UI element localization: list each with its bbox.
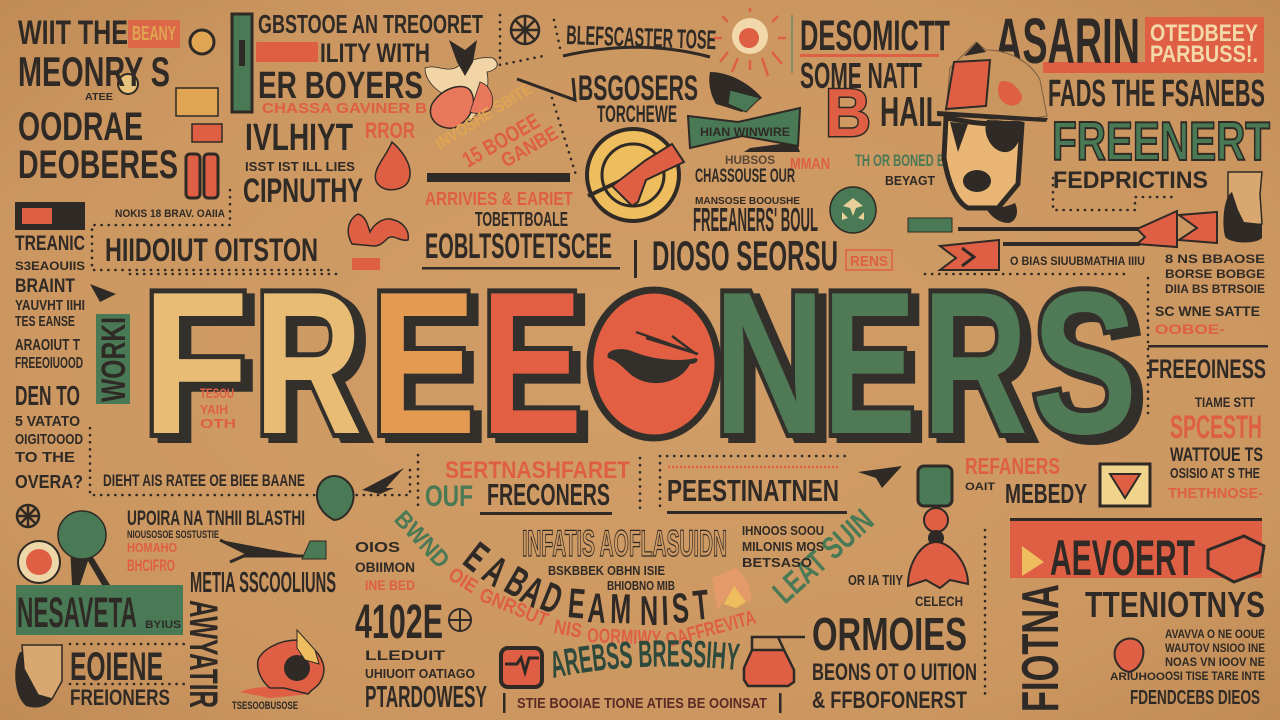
curved text group: OIE — [444, 564, 481, 598]
text block: centre right small: BEYAGT — [885, 173, 935, 188]
text block: red green bottom: STIE BOOIAE TIONE ATIES BE OOINSAT — [517, 695, 767, 712]
banner: red AEVOERT — [1010, 518, 1264, 586]
text block: lower left: METIA SSCOOLIUNS — [190, 567, 336, 599]
curved text group: S — [670, 586, 690, 633]
text block: left column: ARAOIUT T — [15, 337, 80, 354]
green vertical tab: WORKI — [95, 317, 133, 402]
curved text group: INFATIS AOFLASUIDN — [522, 523, 727, 564]
text block: lower middle left: OBIIMON — [355, 559, 415, 575]
text block: centre small: MMAN — [790, 156, 830, 173]
text block: top second column: ER BOYERS — [258, 65, 423, 107]
dashed box: caption under title — [90, 428, 410, 495]
text block: lower left names: EOIENE — [70, 645, 163, 689]
dotted rule above title — [130, 274, 1148, 420]
text block: lower middle left: UHIUOIT OATIAGO — [365, 666, 475, 681]
curved text group: I — [661, 588, 669, 635]
red small text under title letters: OTH — [200, 416, 236, 431]
text block: lower middle left: LLEDUIT — [365, 647, 446, 663]
text block: ormoies: ORMOIES — [812, 608, 967, 660]
text block: centre small: MANSOSE BOOUSHE — [695, 196, 800, 207]
text block: bottom right — [1012, 584, 1265, 712]
icon: small plane — [858, 466, 902, 488]
text block: upper band left: HIIDOIUT OITSTON — [105, 232, 318, 268]
title shadow layer: E — [378, 254, 484, 481]
text block: top second column: GBSTOOE AN TREOORET — [258, 9, 483, 39]
text block: right headline: FEDPRICTINS — [1053, 167, 1208, 194]
icon: green circle badge — [830, 187, 876, 233]
text block: lower left names — [70, 644, 185, 710]
icon: red figure — [908, 466, 968, 588]
curved text group: N — [640, 589, 658, 635]
text block: lower middle left — [355, 539, 487, 714]
text block: bottom right: AVAVVA O NE OOUE — [1165, 627, 1265, 641]
dashed box: caption under title: DIEHT AIS RATEE OE BIEE BAANE — [103, 471, 305, 490]
text block: bottom right: WAUTOV NSIOO INE — [1165, 641, 1265, 655]
text block: left column: S3EAOUIIS — [15, 259, 85, 273]
text block: freeconers heading: FRECONERS — [487, 477, 610, 512]
curved text group: GNRSUT — [476, 584, 551, 632]
text block: lower left: UPOIRA NA TNHII BLASTHI — [127, 507, 305, 530]
banner: top right red: PARBUSS!. — [1150, 41, 1258, 68]
curved text group: E — [566, 581, 587, 628]
main title: FREEONERS: S — [1032, 249, 1137, 476]
icon: green ribbon — [688, 72, 800, 152]
red tilted label — [432, 79, 562, 172]
arrow: lower left green — [220, 540, 326, 562]
text block: left column: 5 VATATO — [15, 413, 80, 430]
title shadow layer: E — [489, 256, 590, 482]
poster: FREEANERS' BOUL — [693, 201, 818, 238]
curved text group: BSKBBEK OBHN ISIE — [548, 563, 665, 578]
curved text group: IHNOOS SOOU — [742, 523, 824, 538]
text block: top centre — [517, 20, 717, 128]
icon: small heart blob — [712, 568, 752, 610]
red small text under title letters: YAIH — [200, 402, 228, 417]
icon: green tree and red seal — [18, 511, 110, 585]
icon: red splash — [348, 214, 408, 270]
icon: helmet man with sunglasses — [937, 42, 1048, 223]
curved text group: D — [534, 574, 569, 624]
text block: freeconers heading — [418, 455, 640, 515]
curved text group: M — [610, 587, 632, 633]
text block: freeconers heading: SERTNASHFARET — [445, 457, 630, 484]
text block: top second column: CIPNUTHY — [243, 172, 363, 210]
text block: lower middle left: OIOS — [355, 539, 400, 556]
text block: right small: O BIAS SIUUBMATHIA IIIU — [1010, 254, 1145, 268]
curved text group: A — [475, 547, 515, 596]
text block: top centre: TORCHEWE — [597, 101, 677, 128]
text block: lower left names: FREIONERS — [70, 685, 170, 710]
banner: green NESAVETA — [16, 585, 183, 637]
icon: bottle right — [1224, 172, 1262, 242]
text block: left column: BRAINT — [15, 276, 75, 297]
text block: freeconers heading: OUF — [425, 480, 473, 513]
icon: red drop — [375, 142, 410, 190]
dotted divider right — [984, 530, 986, 700]
text block: lower right: MEBEDY — [1005, 478, 1087, 509]
text block: top right: SOME NATT — [800, 55, 922, 96]
text block: top left: ATEE — [85, 92, 113, 103]
title shadow layer: R — [262, 254, 370, 481]
text block: peestination — [660, 456, 847, 514]
icon: green ribbon: HIAN WINWIRE — [700, 125, 790, 139]
curved text group: E — [455, 534, 497, 581]
curved text group: B — [497, 558, 536, 608]
text block: lower left: BHCIFRO — [127, 556, 175, 575]
title shadow layer: S — [1040, 254, 1145, 481]
curved text group: BWND — [389, 506, 455, 574]
text block: lower left: HOMAHO — [127, 540, 177, 555]
curved text group: BETSASO — [742, 555, 812, 570]
icon: lower left machine — [15, 645, 62, 708]
icon: green vertical bar — [232, 14, 252, 112]
caption small: NOKIS 18 BRAV. OAIIA — [115, 208, 225, 220]
curved text group: NIS — [552, 616, 584, 643]
text block: top right: DESOMICTT — [800, 12, 950, 60]
banner: green NESAVETA: NESAVETA — [17, 589, 137, 637]
text block: top left: OODRAE — [18, 105, 143, 149]
red tilted label: GANBE — [498, 122, 562, 172]
text block: bottom right: NOAS VN IOOV NE — [1165, 655, 1265, 669]
text block: lower middle left: 4102E — [355, 596, 443, 649]
text block: left column: TES EANSE — [15, 313, 75, 330]
text block: centre small: HUBSOS — [725, 153, 775, 167]
red small text under title letters: TESOU — [200, 385, 234, 401]
text block: top right: HAIL — [880, 88, 942, 135]
icon: bottom jar — [744, 637, 805, 686]
text block: right small: DIIA BS BTRSOIE — [1165, 282, 1265, 296]
text block: right small: OOBOE- — [1155, 321, 1225, 337]
text block: centre small: CHASSOUSE OUR — [695, 166, 795, 187]
banner: top right red: OTEDBEEY — [1150, 20, 1258, 47]
curved text group — [389, 502, 880, 652]
heading: Asarin: ASARIN — [995, 5, 1140, 77]
text block: left column: TO THE — [15, 449, 75, 466]
text block: top second column: RROR — [365, 118, 415, 143]
text block: ormoies — [812, 608, 977, 714]
text block: bottom right: OSI TISE TARE INTE — [1165, 669, 1265, 683]
text block: right of centre band: RENS — [850, 253, 888, 270]
curved text group: LEAT SUIN — [766, 502, 880, 610]
text block: bottom right: FIOTNA — [1012, 584, 1070, 712]
text block: bottom right: ARIUHOO — [1110, 671, 1165, 683]
banner: top right red — [1043, 17, 1264, 73]
text block: peestination: PEESTINATNEN — [667, 473, 839, 508]
curved text group: MILONIS MOS — [742, 539, 824, 554]
text block: top second column: ISST IST ILL LIES — [245, 159, 355, 174]
main title: FREEONERS: R — [922, 251, 1028, 477]
text block: top centre: BSGOSERS — [578, 69, 698, 108]
text block: centre archives: ARRIVIES & EARIET — [425, 189, 573, 209]
icon: sunburst — [714, 8, 793, 76]
text block: ormoies: BEONS OT O UITION — [812, 659, 977, 686]
text block: left column: DEN TO — [15, 380, 80, 411]
icon: bottom right red bird — [1115, 638, 1143, 672]
icon: red b letter: B — [825, 75, 871, 151]
curved text group: A — [586, 586, 607, 633]
text block: top second column: IVLHIYT — [245, 117, 353, 159]
text block: right small: THETHNOSE- — [1168, 485, 1263, 502]
title letter O with bowl icon — [590, 290, 718, 438]
text block: centre archives: EOBLTSOTETSCEE — [425, 227, 612, 266]
text block: lower middle left: INE BED — [365, 577, 415, 593]
text block: top left — [18, 14, 178, 187]
text block: lower left — [127, 507, 336, 599]
icon: small wheel — [17, 505, 39, 527]
text block: right headline — [1048, 73, 1270, 210]
curved text group: OAFFREVITA — [664, 607, 758, 652]
text block: top left: WIIT THE — [18, 14, 128, 52]
text block: centre archives — [422, 189, 620, 270]
icon: yellow circle with red wedge — [587, 129, 684, 221]
banner: green NESAVETA: BYIUS — [145, 619, 181, 631]
curved text group: BHIOBNO MIB — [607, 578, 675, 593]
title shadow layer: E — [831, 254, 924, 481]
text block: red green bottom — [503, 640, 782, 713]
dark stripe bar — [427, 173, 570, 182]
red small text under title letters — [200, 385, 236, 431]
text block: lower right: OR IA TIIY — [848, 572, 903, 589]
text block: top centre: BLEFSCASTER TOSE — [566, 20, 717, 55]
text block: top left: MEONRY S — [18, 48, 170, 95]
dotted connector lines — [500, 15, 576, 175]
text block: right of centre band: DIOSO SEORSU — [652, 232, 838, 279]
red tilted label: INVOSHE SBITE — [432, 79, 535, 153]
text block: left column: OVERA? — [15, 472, 83, 492]
icon: emblem square — [1100, 464, 1150, 506]
text block: left column: YAUVHT IIHI — [15, 297, 85, 314]
title shadow layer: F — [150, 256, 257, 482]
text block: lower right — [848, 453, 1087, 609]
icon: fox character — [425, 40, 497, 128]
text block: right small: BORSE BOBGE — [1165, 267, 1265, 281]
icon: green leaf and plane — [317, 468, 404, 520]
title shadow layer: R — [930, 256, 1036, 482]
title shadow layer — [150, 254, 1145, 482]
text block: right small: TIAME STT — [1195, 394, 1255, 410]
red tilted label: 15 BOOEE — [458, 108, 544, 172]
curved text group: A — [513, 568, 551, 617]
text block: left column: TREANIC — [15, 232, 85, 255]
icon: long arrows — [908, 211, 1217, 270]
text block: top second column: ILITY WITH — [320, 38, 430, 68]
icon: red barrel: TSESOOBUSOSE — [232, 700, 298, 712]
text block: left column: FREEOIUOOD — [15, 355, 83, 372]
icon: dark red bottle tag — [15, 202, 85, 230]
text block: top second column — [243, 9, 483, 210]
text block: centre small — [693, 153, 830, 238]
text block: left column: OIGITOOOD — [15, 431, 83, 448]
main title: FREEONERS: E — [370, 249, 476, 476]
title shadow layer: N — [722, 256, 833, 482]
text block: centre right small: TH OR BONED B — [855, 151, 945, 170]
text block: lower right: CELECH — [915, 593, 963, 609]
text block: top right — [800, 12, 950, 135]
text block: lower middle left: PTARDOWESY — [365, 679, 487, 714]
text block: lower right: OAIT — [965, 481, 995, 493]
arrow: small left — [90, 284, 116, 302]
text block: upper band left — [92, 190, 330, 270]
main title: FREEONERS: E — [481, 251, 582, 477]
text block: lower right: REFANERS — [965, 453, 1060, 479]
icon: compass wheel — [511, 16, 539, 44]
text block: top second column: CHASSA GAVINER B — [262, 100, 427, 117]
text block: left column — [15, 232, 85, 492]
main title: FREEONERS: F — [142, 251, 249, 477]
icon: small lower wheel — [449, 609, 471, 631]
text block: centre right small — [855, 151, 945, 188]
icon: red barrel — [232, 630, 324, 712]
icon: top left tag and bottles — [118, 20, 222, 198]
text block: top left: DEOBERES — [18, 143, 178, 187]
text block: lower left: NIOUSOSOE SOSTUSTIE — [127, 529, 219, 541]
main title: FREEONERS: R — [254, 249, 362, 476]
text block: right small: 8 NS BBAOSE — [1165, 252, 1265, 266]
curved text group: T — [691, 582, 711, 630]
text block: ormoies: & FFBOFONERST — [812, 687, 967, 714]
text block: centre archives: TOBETTBOALE — [475, 209, 568, 231]
text block: right small — [1010, 252, 1268, 502]
icon: red square badge — [501, 648, 542, 687]
text block: right small: SC WNE SATTE — [1155, 303, 1260, 319]
icon: top left tag and bottles: BEANY — [132, 23, 176, 45]
main title: FREEONERS — [142, 249, 1145, 482]
main title: FREEONERS: N — [714, 251, 825, 477]
curved text group: OORMIWY — [587, 625, 662, 650]
main title: FREEONERS: E — [823, 249, 916, 476]
text block: red green bottom: AREBSS BRESSIHY — [553, 640, 740, 678]
